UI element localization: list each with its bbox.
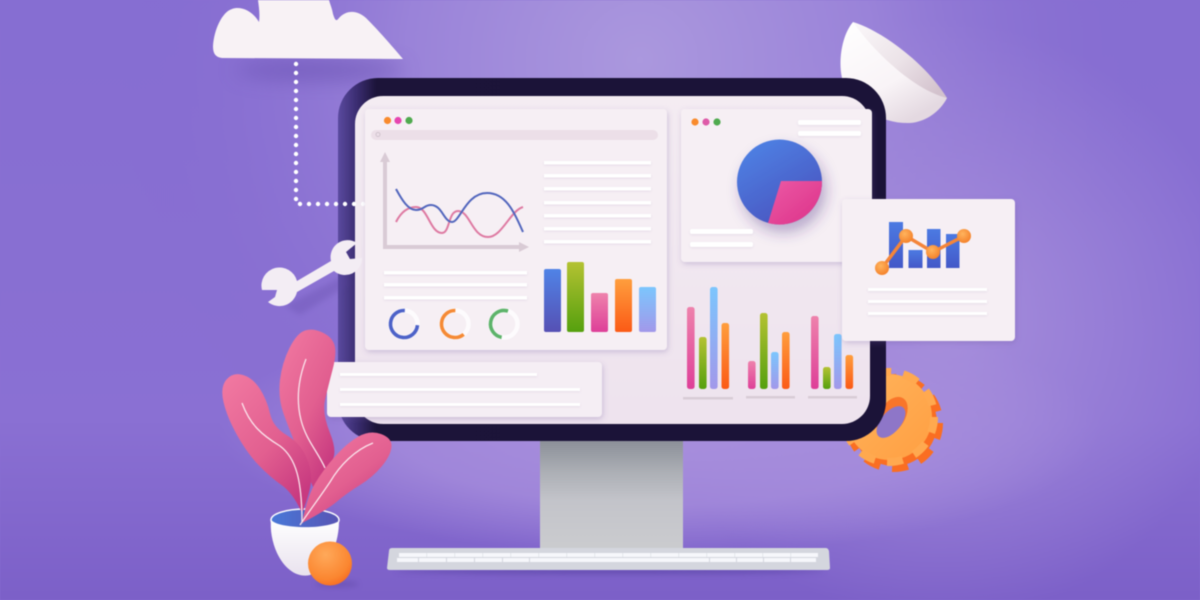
monitor bezel bbox=[338, 78, 886, 441]
text lines bottom left bbox=[690, 229, 753, 247]
bar group 3 bbox=[808, 316, 857, 398]
donut gauges bbox=[389, 305, 520, 343]
chart axes bbox=[380, 152, 529, 252]
card bars bbox=[889, 222, 960, 268]
monitor stand bbox=[540, 440, 683, 550]
pie chart bbox=[737, 140, 822, 225]
donut blue bbox=[389, 309, 419, 339]
pot body bbox=[271, 519, 339, 576]
text lines under chart bbox=[384, 271, 527, 300]
bar chart colored bbox=[544, 262, 656, 332]
icon: white cloud bbox=[213, 0, 405, 80]
card bbox=[842, 199, 1015, 341]
card text lines bbox=[340, 373, 580, 406]
bar group 1 bbox=[683, 287, 733, 400]
window control dots bbox=[384, 117, 413, 124]
line chart bbox=[380, 152, 529, 252]
dotted connector from cloud to monitor bbox=[296, 64, 368, 204]
gear front face bbox=[844, 372, 934, 462]
pot inside bbox=[271, 509, 339, 531]
series pink bbox=[396, 207, 523, 237]
window card bbox=[365, 109, 667, 350]
card trend line bbox=[875, 229, 971, 275]
bar group 2 bbox=[746, 313, 795, 398]
panel: pie chart window bbox=[681, 109, 872, 262]
gear hole bbox=[870, 391, 914, 443]
left leaf bbox=[222, 374, 311, 523]
panel: floating combo chart card bbox=[842, 199, 1015, 341]
text lines top right bbox=[798, 120, 861, 136]
donut orange bbox=[436, 305, 474, 343]
gear extruded back bbox=[849, 378, 939, 468]
donut green bbox=[488, 308, 520, 340]
icon: gear bbox=[844, 372, 939, 468]
icon: potted plant bbox=[222, 330, 392, 587]
card bbox=[327, 362, 602, 417]
middle leaf bbox=[279, 330, 335, 487]
panel: line chart dashboard window bbox=[365, 109, 667, 350]
keyboard keys bbox=[397, 553, 818, 562]
card text lines bbox=[868, 288, 987, 315]
panel: floating text card bottom left bbox=[327, 362, 602, 417]
right leaf bbox=[300, 432, 392, 525]
window control dots bbox=[691, 118, 721, 126]
search bar bbox=[371, 130, 658, 140]
monitor screen bbox=[355, 96, 870, 424]
icon: wrench bbox=[261, 240, 362, 315]
icon: white bowl hemisphere bbox=[840, 22, 947, 123]
orange ball bbox=[308, 542, 359, 587]
keyboard bbox=[387, 548, 830, 574]
text lines right of chart bbox=[544, 161, 651, 244]
panel: grouped bar charts on screen bbox=[683, 287, 857, 400]
window card bbox=[681, 109, 872, 262]
series blue bbox=[396, 189, 523, 232]
